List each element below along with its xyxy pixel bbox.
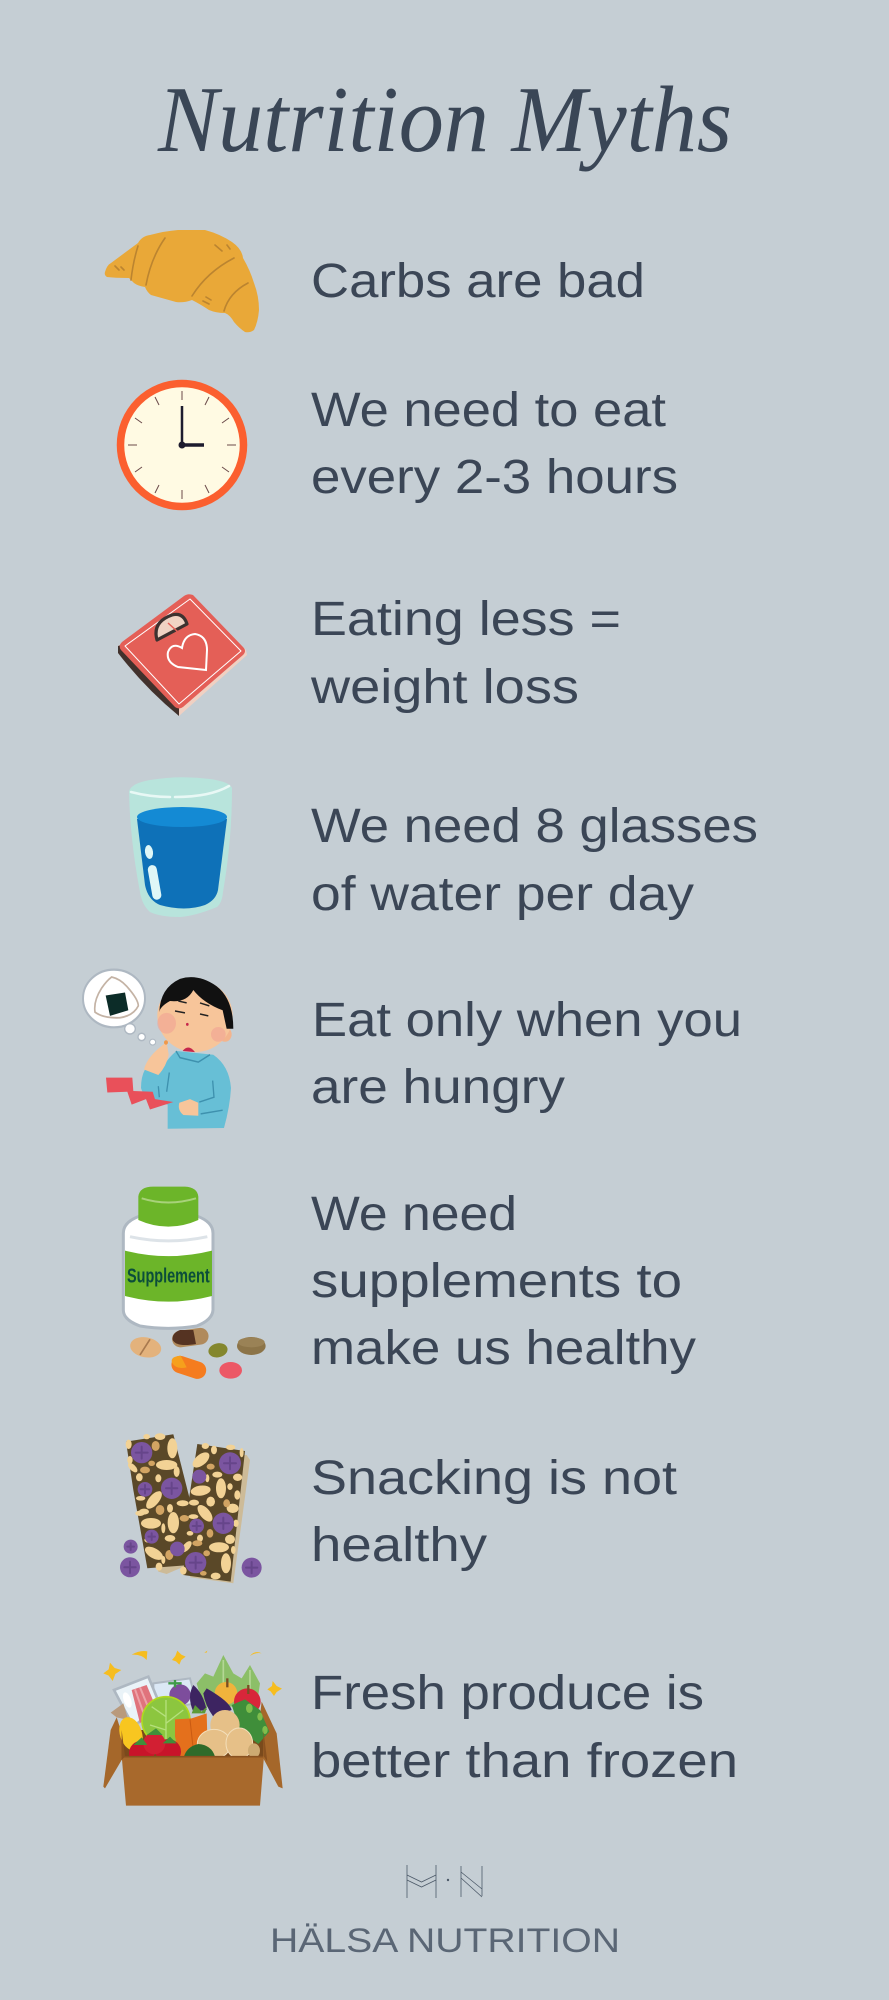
text: eat only when hungry: are hungry: [311, 1061, 565, 1114]
text: eat every 2-3 hours: every 2-3 hours: [311, 451, 678, 504]
hunger pang bolt: [106, 1078, 173, 1109]
text: 8 glasses of water: of water per day: [311, 868, 694, 921]
text: supplements: [311, 1188, 696, 1375]
text: supplements: supplements to: [311, 1255, 682, 1308]
thought bubble with rice ball: [83, 970, 156, 1045]
text: supplements: We need: [311, 1188, 517, 1241]
myth row: snacking: [120, 1433, 677, 1583]
text: snacking: [311, 1452, 677, 1572]
text: 8 glasses of water: [311, 800, 758, 921]
myth row: carbs: [105, 230, 645, 332]
icon: produce box: [103, 1651, 283, 1806]
icon: HN monogram: [407, 1865, 482, 1898]
myth row: hungry: [83, 970, 742, 1129]
text: eat only when hungry: [311, 994, 742, 1114]
icon: croissant: [105, 230, 259, 332]
text: fresh produce: better than frozen: [311, 1735, 738, 1788]
text: snacking: Snacking is not: [311, 1452, 677, 1505]
icon: glass of water: [129, 777, 232, 917]
icon: hungry person thinking: [83, 970, 233, 1129]
text: fresh produce: [311, 1667, 738, 1788]
text: eat only when hungry: Eat only when you: [312, 994, 742, 1047]
text: eat every 2-3 hours: [311, 384, 678, 504]
text: 8 glasses of water: We need 8 glasses: [311, 800, 758, 853]
icon: bathroom scale: [118, 594, 247, 716]
text: eating less = weight loss: weight loss: [310, 661, 579, 714]
text: snacking: healthy: [311, 1519, 487, 1572]
icon: supplement bottle and pills: Supplement: [127, 1264, 210, 1287]
text: supplements: make us healthy: [311, 1322, 696, 1375]
icon: clock: [120, 384, 244, 506]
text: eat every 2-3 hours: We need to eat: [311, 384, 666, 437]
person body: [141, 1051, 231, 1129]
icon: supplement bottle and pills: [123, 1187, 266, 1381]
wordmark: HÄLSA NUTRITION: [270, 1922, 620, 1960]
text: eating less = weight loss: [310, 593, 621, 714]
myth row: supplements: [123, 1187, 696, 1381]
title: Nutrition Myths: [157, 68, 732, 172]
myth row: eating less: [118, 593, 621, 716]
text: eating less = weight loss: Eating less =: [311, 593, 621, 646]
text: carbs are bad: Carbs are bad: [311, 255, 645, 308]
text: fresh produce: Fresh produce is: [311, 1667, 704, 1720]
head: [157, 977, 233, 1052]
myth row: fresh produce: [103, 1651, 738, 1806]
icon: granola bars with blueberries: [120, 1433, 262, 1583]
myth row: eating schedule: [120, 384, 678, 506]
myth row: water: [129, 777, 758, 921]
logo: [270, 1865, 620, 1960]
